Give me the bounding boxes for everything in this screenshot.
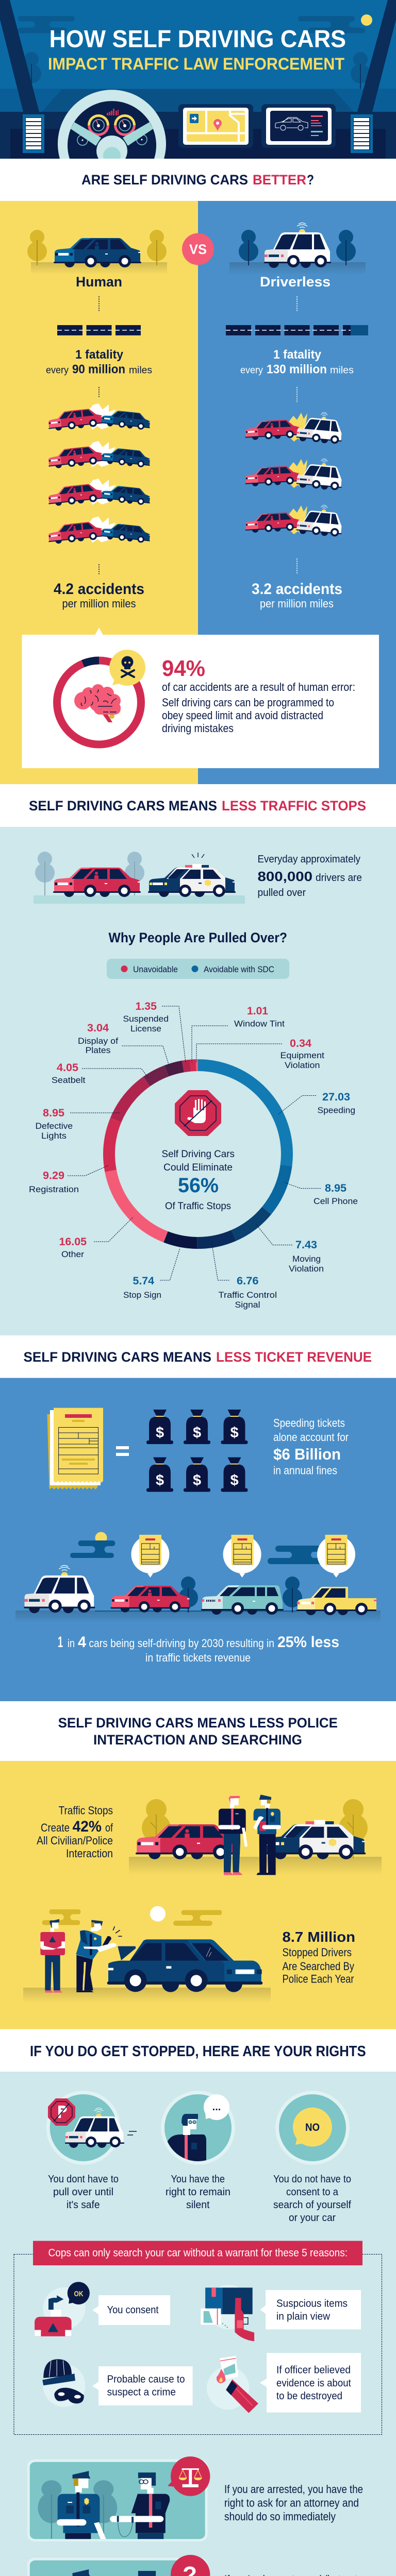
text: right one [48,2174,119,2211]
label: traffic control signal [219,1275,277,1310]
panel: hero windshield and dashboard [0,0,396,159]
callout: evidence destroyed [260,2353,361,2413]
heading: less police interaction: SELF DRIVING CARS MEANS LESS POLICE [58,1715,338,1731]
panel: ticket revenue [0,1378,396,1701]
label: driverless: Driverless [260,274,331,290]
text: human error explanation: of car accidents are a result of human error: [162,681,355,693]
label: traffic control signal: 6.76 [237,1275,259,1287]
panel: human versus driverless comparison [0,201,396,784]
label: registration: 9.29 [43,1170,64,1182]
text: right three [273,2174,351,2224]
text: pulled over count [258,854,362,899]
lower dashboard [10,129,386,159]
icon: red car [110,1586,190,1613]
navigation screen [178,104,253,148]
callout: evidence destroyed: to be destroyed [276,2391,342,2402]
icon: consent person with OK bubble [35,2282,90,2336]
icon: trees [35,852,144,895]
text: revenue reduction: in traffic tickets revenue [145,1651,251,1664]
icon: arrow sign [190,114,199,123]
stat: driverless fatality rate: 1 fatality [273,348,322,362]
banner: five reasons: Cops can only search your car without a warrant for these 5 reasons: [48,2247,348,2259]
icon: right to remain silent [161,2091,235,2165]
callout: you consent [92,2295,170,2325]
legend: Unavoidable [133,964,178,974]
icon: cloud right [268,1546,321,1564]
legend: Avoidable with SDC [204,964,274,974]
text: 42 percent of interaction [37,1804,113,1860]
text: right one: it's safe [67,2199,100,2211]
icon: officer searching car trunk [40,1919,262,1993]
callout: evidence destroyed: If officer believed [276,2365,351,2376]
illustration: arrest scene [27,2456,210,2541]
text: right three: or your car [289,2212,336,2224]
icon: cloud left [42,1909,80,1925]
callout: probable cause: suspect a crime [107,2386,176,2398]
text: revenue reduction: 4 [78,1634,86,1651]
icon: no consent bubble [275,2091,350,2165]
label: window tint [234,1005,285,1028]
text: pulled over count: drivers are [316,872,362,884]
text: arrest right: right to ask for an attorney and [224,2496,359,2509]
heading: are self driving cars better: ? [307,172,314,188]
donut centre text: Could Eliminate [163,1162,233,1173]
text: arrest right: should do so immediately [224,2510,336,2523]
label: registration: Registration [29,1184,79,1194]
ground shadow [34,895,245,904]
text: 42 percent of interaction: Interaction [66,1847,113,1860]
donut centre text [162,1149,235,1212]
icon: beanie and mask [42,2359,86,2407]
icon: brain [74,684,121,722]
label: defective lights: 8.95 [43,1107,64,1119]
label: display of plates: Display of [78,1036,118,1046]
text: 8.7 million searched: Stopped Drivers [283,1946,352,1959]
stat: human fatality rate: 90 million [72,363,125,376]
icon: siren flash [192,853,204,858]
stat: 94 percent: 94% [162,656,205,681]
icon: yellow pickup [296,1587,376,1615]
icon: no consent bubble: NO [305,2122,320,2133]
text: 8.7 million searched: Police Each Year [283,1973,354,1986]
label: speeding: 27.03 [322,1091,350,1103]
callout: suspicious items [260,2290,361,2329]
icon: right trees [239,230,356,265]
icon: driverless car [264,223,331,268]
icon: box photo and gun [201,2285,254,2341]
text: right three: You do not have to [273,2174,351,2185]
car hood [42,89,354,112]
icon: stopped red car [136,1824,240,1859]
label: other [59,1236,87,1259]
icon: moon [361,14,372,26]
stat: driverless fatality rate [240,348,354,376]
text: 42 percent of interaction: 42% [72,1818,102,1835]
icon: driverless crashes [244,410,344,537]
text: speeding ticket revenue [273,1417,349,1477]
stat: driverless fatality rate: every [240,365,263,376]
donut centre text: Self Driving Cars [162,1149,235,1160]
stat: human fatality rate: 1 fatality [75,348,124,362]
text: 42 percent of interaction: Create [41,1821,70,1834]
label: moving violation [289,1239,324,1274]
icon: left tree [22,52,41,84]
text: human error explanation [162,681,355,735]
label: defective lights [35,1107,73,1141]
icon: silent speech bubble: ... [212,2102,221,2113]
label: traffic control signal: Signal [235,1300,260,1310]
label: suspended license [123,1001,169,1033]
icon: open trunk car [107,1939,262,1992]
icon: self driving car [24,1565,95,1613]
text: 42 percent of interaction: All Civilian/Police [37,1834,113,1847]
car diagnostics screen [261,104,336,148]
left ground shadow [31,262,167,275]
text: right two: right to remain [166,2187,230,2198]
icon: left air vent [23,114,44,153]
icon: right cloud [298,16,365,33]
donut centre text: 56% [178,1174,219,1197]
stat: human accidents: 4.2 accidents [54,581,144,598]
label: human: Human [76,274,122,290]
ground shadow [23,1988,271,2003]
figure: bystander [40,1919,65,1993]
label: stop sign [123,1275,161,1300]
icon: speeding ticket stack [47,1408,103,1489]
label: moving violation: 7.43 [295,1239,317,1251]
icon: skull bubble [109,650,145,686]
icon: pulled over red car [53,868,141,897]
callout: suspicious items: Suspcious items [276,2298,348,2310]
icon: police car [148,864,236,897]
title: IMPACT TRAFFIC LAW ENFORCEMENT [48,55,344,73]
icon: driverless road distance [226,325,368,335]
dotted connectors [99,296,297,574]
text: human error explanation: obey speed limit and avoid distracted [162,709,323,722]
text: revenue reduction: 1 [58,1634,63,1651]
chart: 94 percent ring [44,648,154,757]
stat: driverless fatality rate: miles [330,365,354,376]
label: display of plates: 3.04 [87,1022,109,1034]
label: other: 16.05 [59,1236,87,1248]
label: speeding: Speeding [318,1106,355,1115]
icon: steering wheel with gauges [58,90,166,159]
stat: human accidents [54,581,144,610]
label: speeding [318,1091,355,1115]
text: right three: consent to a [286,2187,339,2198]
figure: driver [218,1796,248,1875]
text: revenue reduction [58,1634,339,1664]
right ground shadow [229,262,366,275]
heading: less ticket revenue: SELF DRIVING CARS MEANS [24,1349,211,1365]
ground shadow [129,1857,382,1875]
label: window tint: 1.01 [247,1005,268,1017]
text: 8.7 million searched [283,1929,355,1986]
stat: driverless fatality rate: 130 million [267,363,327,376]
icon: vs badge [182,233,214,265]
text: right two: silent [186,2199,210,2211]
panel: your rights [0,2072,396,2576]
icon: tree two [283,1577,302,1613]
text: revenue reduction: in [68,1637,75,1650]
stat: driverless accidents: per million miles [260,597,334,610]
legend [107,959,289,979]
text: speeding ticket revenue: in annual fines [273,1464,337,1477]
stat: human fatality rate: every [46,365,69,376]
banner: five reasons [33,2241,362,2265]
text: 8.7 million searched: Are Searched By [283,1960,354,1973]
text: right two [166,2174,230,2211]
callout: human error [22,628,379,768]
text: speeding ticket revenue: $6 Billion [273,1445,341,1463]
stat: driverless accidents [252,581,342,610]
icon: driver and officer talking [218,1794,281,1875]
text: right two: You have the [171,2174,225,2185]
icon: lighter burning evidence [207,2355,258,2413]
label: suspended license: License [130,1024,161,1033]
text: right one: pull over until [53,2187,113,2198]
heading: are self driving cars better: BETTER [253,172,306,188]
icon: equals sign [116,1446,129,1456]
label: seatbelt: Seatbelt [52,1075,86,1085]
icon: question bubble [168,2555,210,2576]
icon: scales of justice bubble [168,2456,210,2496]
icon: sun [95,1532,107,1544]
text: speeding ticket revenue: alone account for [273,1431,349,1444]
donut centre text: Of Traffic Stops [165,1201,231,1212]
text: arrest right [224,2483,363,2523]
chart: donut of stop reasons [109,1065,287,1243]
text: revenue reduction: 25% less [277,1634,339,1651]
heading: less ticket revenue [24,1349,372,1365]
title: HOW SELF DRIVING CARS [50,25,346,53]
icon: ticket bubble one [131,1535,169,1578]
label: other: Other [61,1249,84,1259]
text: arrest right: If you are arrested, you have the [224,2483,363,2496]
icon: human car [54,238,141,267]
right windshield pillar [357,0,396,112]
label: window tint: Window Tint [234,1019,285,1028]
panel: traffic stops [0,827,396,1335]
icon: human road distance [57,325,141,335]
text: 8.7 million searched: 8.7 Million [283,1929,355,1945]
dashboard body [0,112,396,159]
stat: driverless accidents: 3.2 accidents [252,581,342,598]
icon: map pin [213,119,222,131]
text: revenue reduction: cars being self-driving by 2030 resulting in [89,1637,274,1650]
label: seatbelt [52,1062,86,1085]
label: stop sign: Stop Sign [123,1290,161,1300]
dashboard top band [0,89,396,112]
label: moving violation: Violation [289,1264,324,1274]
icon: police car [261,1820,366,1859]
label: defective lights: Defective [35,1121,73,1131]
heading: less traffic stops: LESS TRAFFIC STOPS [222,798,366,814]
heading: why people are pulled over: Why People Are Pulled Over? [108,930,287,945]
icon: left trees [27,230,167,265]
icon: right air vent [351,114,373,153]
text: 42 percent of interaction: Traffic Stops [59,1804,113,1817]
chart leader lines [68,1006,321,1280]
icon: left cloud [18,16,75,33]
figure: officer [76,1920,122,1992]
text: pulled over count: 800,000 [258,869,312,884]
heading: less traffic stops [29,798,366,814]
label: moving violation: Moving [292,1254,321,1264]
text: pulled over count: Everyday approximately [258,854,360,865]
label: suspended license: Suspended [123,1014,169,1024]
icon: left tree [142,1799,171,1856]
icon: car outline [275,117,308,130]
icon: pull over when safe [46,2091,137,2165]
label: equipment violation: 0.34 [290,1038,311,1049]
text: speeding ticket revenue: Speeding tickets [273,1417,345,1430]
stat: human fatality rate [46,348,152,376]
text: human error explanation: Self driving cars can be programmed to [162,696,334,709]
text: 42 percent of interaction: of [105,1821,113,1834]
label: stop sign: 5.74 [133,1275,154,1287]
label: suspended license: 1.35 [135,1001,157,1012]
icon: moon [150,1906,166,1922]
label: registration [29,1170,79,1194]
icon: ticket bubble two [223,1535,261,1578]
label: equipment violation: Violation [285,1060,320,1070]
stat: human accidents: per million miles [62,597,136,610]
label: cell phone: Cell Phone [314,1196,358,1206]
icon: money bags [146,1410,248,1492]
text: pulled over count: pulled over [258,887,306,899]
icon: human crashes [47,403,152,545]
label: equipment violation [280,1038,324,1070]
icon: vs badge: VS [189,242,207,257]
road shadow [15,1611,381,1623]
label: display of plates: Plates [86,1045,110,1055]
callout: probable cause: Probable cause to [107,2374,185,2385]
icon: cloud right [173,1910,222,1926]
left windshield pillar [0,0,39,112]
callout: suspicious items: in plain view [276,2311,331,2323]
illustration: stopped scene [27,2555,210,2576]
label: OK: OK [74,2290,84,2298]
callout: you consent: You consent [107,2304,159,2316]
callout: evidence destroyed: evidence is about [276,2378,351,2389]
panel: police interaction and searching [0,1761,396,2029]
label: cell phone: 8.95 [325,1182,346,1194]
heading: less ticket revenue: LESS TICKET REVENUE [216,1349,372,1365]
icon: ticket bubble three [317,1535,355,1578]
icon: silent speech bubble [204,2094,229,2120]
label: defective lights: Lights [41,1131,67,1141]
dashed frame around warrant reasons [14,2255,382,2435]
icon: teal wagon [201,1585,284,1615]
label: seatbelt: 4.05 [57,1062,78,1074]
callout: probable cause [92,2366,193,2405]
icon: right tree [339,1799,368,1858]
heading: less police interaction: INTERACTION AND SEARCHING [93,1732,302,1748]
icon: tree one [178,1577,198,1613]
text: right three: search of yourself [273,2199,351,2211]
label: traffic control signal: Traffic Control [219,1290,277,1300]
label: equipment violation: Equipment [280,1050,324,1060]
icon: cloud left [70,1540,116,1558]
icon: stop sign with hand [175,1090,221,1136]
stat: human fatality rate: miles [129,365,152,376]
title [48,25,346,73]
text: human error explanation: driving mistakes [162,722,234,735]
heading: are self driving cars better: ARE SELF DRIVING CARS [81,172,248,188]
heading: less police interaction [58,1715,338,1748]
road line [95,1611,297,1612]
label: cell phone [314,1182,358,1206]
heading: less traffic stops: SELF DRIVING CARS MEANS [29,798,217,814]
text: right one: You dont have to [48,2174,119,2185]
label: display of plates [78,1022,118,1055]
figure: officer [254,1794,281,1875]
icon: right tree [351,52,370,89]
